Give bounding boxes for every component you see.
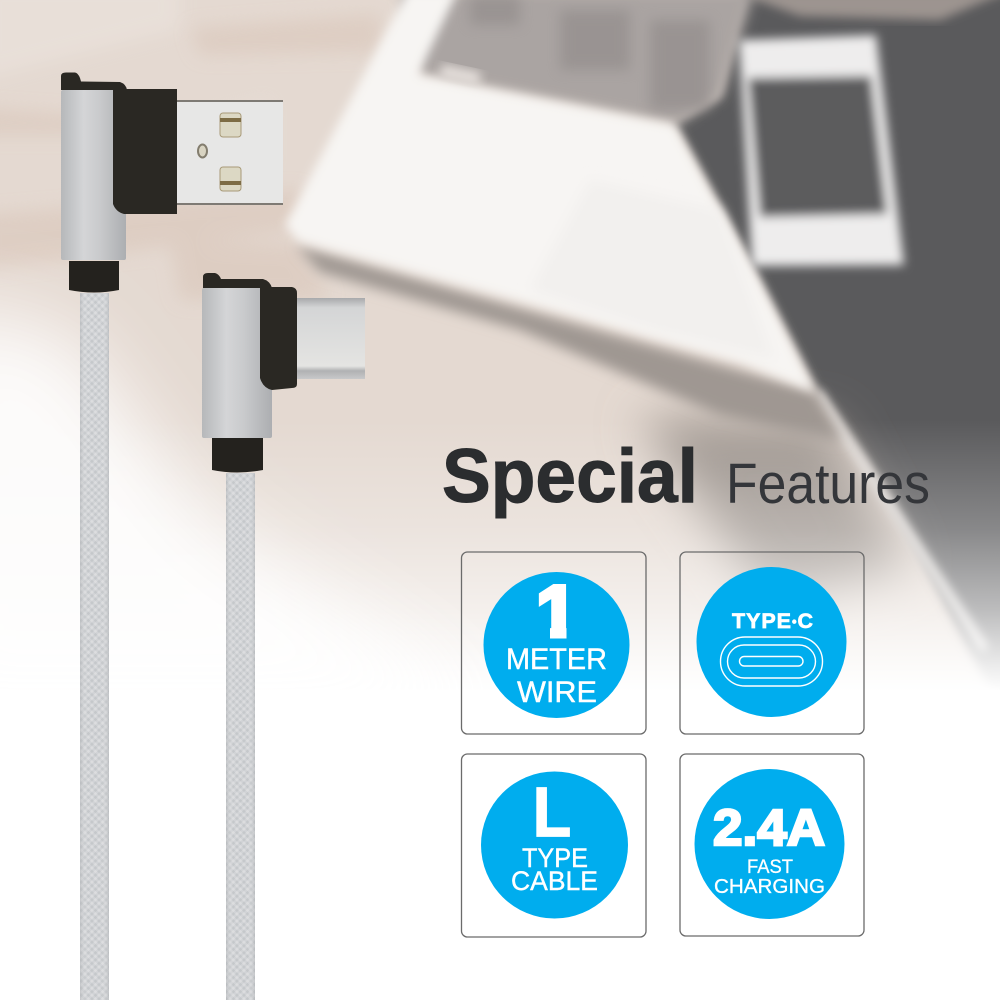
USB metal plug <box>177 100 283 205</box>
right cable: USB Type-C connector <box>202 273 365 1000</box>
black connector block <box>260 287 297 390</box>
background: dark desk surface <box>674 0 1000 720</box>
braided wire <box>80 293 109 1000</box>
blurred laptop and phone background photo <box>0 0 1000 680</box>
silver housing <box>61 90 126 260</box>
label CABLE: CABLE <box>511 866 598 896</box>
background: laptop shadow <box>296 245 842 442</box>
black strain relief <box>212 438 263 472</box>
badge circle <box>484 572 630 718</box>
background: laptop body <box>285 0 815 392</box>
background: phone <box>739 35 904 266</box>
label CHARGING: CHARGING <box>714 876 825 898</box>
letter L: L <box>533 773 571 851</box>
black top cap <box>61 72 127 90</box>
badge circle <box>694 769 844 919</box>
value 2.4A: 2.4A <box>713 799 825 856</box>
panel: 1 meter wire <box>462 552 646 734</box>
background: laptop key highlight <box>439 64 481 86</box>
label TYPE: TYPE <box>522 843 588 873</box>
number 1: 1 <box>536 570 578 654</box>
black strain relief <box>69 261 119 292</box>
badge circle <box>481 772 628 918</box>
icon: USB-C port <box>720 637 822 686</box>
background: top right beige streak <box>730 0 1000 20</box>
background: shadow beyond laptop tip <box>640 420 910 610</box>
background: laptop touchpad edge tone <box>718 204 737 236</box>
background: fade to white <box>0 420 1000 692</box>
background: laptop keyboard <box>400 0 755 125</box>
background: desk wood streaks <box>0 14 380 300</box>
left cable: USB-A connector <box>61 72 283 1000</box>
black top cap <box>203 273 272 288</box>
background: light strip along desk edge <box>817 392 985 650</box>
badge circle <box>696 567 846 717</box>
title: Features: Features <box>726 452 930 516</box>
label TYPE-C: C <box>797 609 813 633</box>
panel: Type-C <box>680 552 864 734</box>
label METER: METER <box>506 643 607 676</box>
label WIRE: WIRE <box>517 676 597 709</box>
label TYPE-C: TYPE <box>732 609 791 633</box>
silver housing <box>202 288 272 438</box>
Type-C metal plug <box>297 298 365 379</box>
panel: L type cable <box>462 754 646 937</box>
label TYPE-C: • <box>792 614 797 629</box>
black connector block <box>113 89 177 214</box>
label FAST: FAST <box>747 857 793 878</box>
title <box>442 434 930 519</box>
panel: 2.4A fast charging <box>680 754 864 936</box>
braided wire <box>226 473 255 1000</box>
title: Special: Special <box>442 434 698 519</box>
